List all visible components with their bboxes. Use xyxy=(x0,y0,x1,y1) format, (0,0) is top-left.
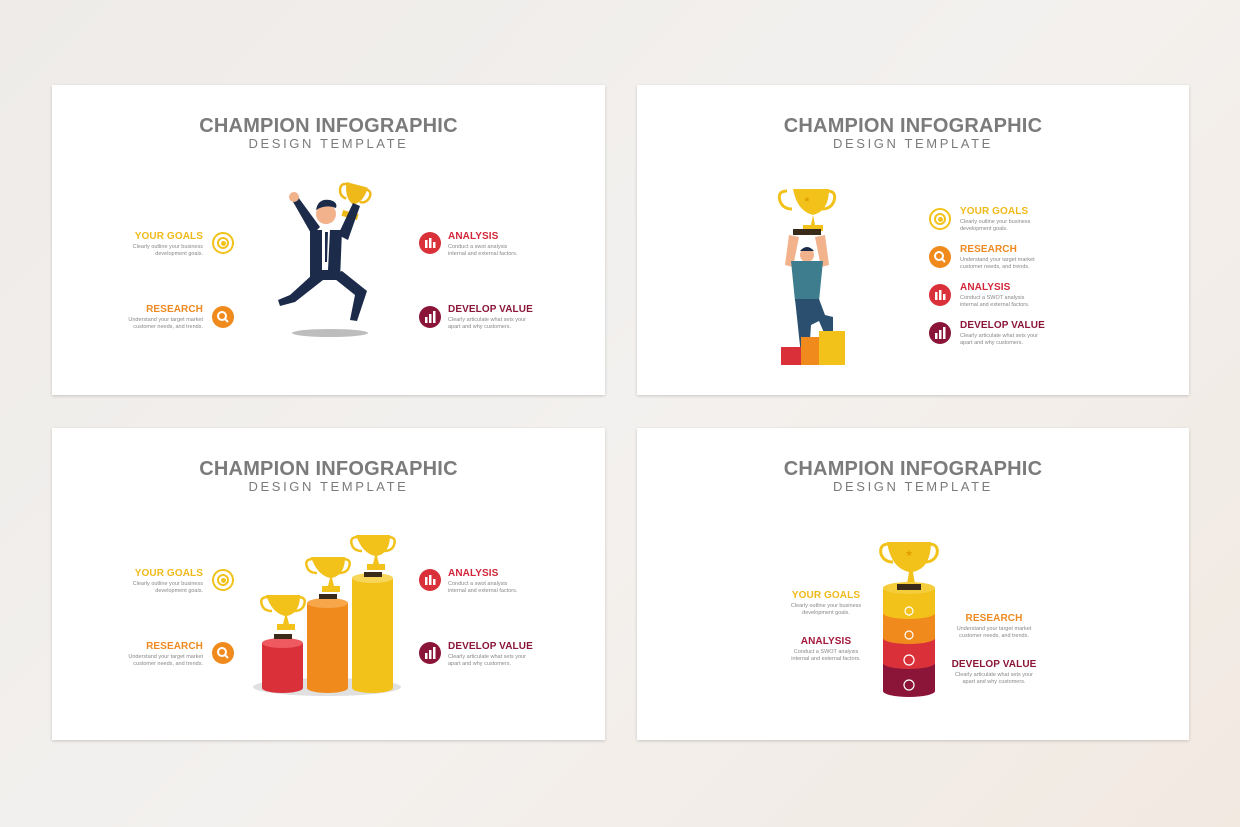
item: your goals: YOUR GOALS xyxy=(135,231,203,242)
subtitle: DESIGN TEMPLATE xyxy=(249,479,408,494)
item: analysis xyxy=(448,231,517,257)
item: your goals: YOUR GOALS xyxy=(135,568,203,579)
text: your goals: Clearly outline your business xyxy=(960,219,1030,225)
item: develop value: apart and why customers. xyxy=(448,324,511,330)
icon: growth bars xyxy=(419,642,441,664)
text: your goals: Clearly outline your business xyxy=(791,603,861,609)
item: research xyxy=(128,304,203,330)
item: your goals: development goals. xyxy=(155,588,203,594)
item: your goals: Clearly outline your business xyxy=(133,581,203,587)
text: your goals: development goals. xyxy=(960,226,1008,232)
text: research: customer needs, and trends. xyxy=(960,264,1030,270)
item: analysis: Conduct a swot analysis xyxy=(448,581,507,587)
item: analysis: ANALYSIS xyxy=(448,568,498,579)
item: your goals: development goals. xyxy=(155,251,203,257)
panel: jumping man xyxy=(52,85,605,395)
text: develop value: DEVELOP VALUE xyxy=(960,320,1045,331)
text: develop value: apart and why customers. xyxy=(960,340,1023,346)
text: analysis: internal and external factors. xyxy=(960,302,1029,308)
title: CHAMPION INFOGRAPHIC xyxy=(784,458,1042,480)
text: research xyxy=(960,244,1035,270)
text: your goals xyxy=(960,206,1030,232)
icon: target xyxy=(929,208,951,230)
text: analysis xyxy=(960,282,1029,308)
illustration: jumping man with trophy xyxy=(278,182,372,337)
text: research: RESEARCH xyxy=(960,244,1017,255)
text: develop value: apart and why customers. xyxy=(962,679,1025,685)
text: your goals xyxy=(791,590,861,616)
illustration: man on steps xyxy=(778,189,845,365)
panel: trophy podiums xyxy=(52,428,605,740)
item: develop value: DEVELOP VALUE xyxy=(448,641,533,652)
icon: magnifier xyxy=(929,246,951,268)
panel: man lifting trophy xyxy=(637,85,1189,395)
icon: target xyxy=(212,569,234,591)
text: develop value xyxy=(960,320,1045,346)
text: analysis: Conduct a SWOT analysis xyxy=(794,649,858,655)
icon: magnifier xyxy=(212,306,234,328)
text: research: Understand your target market xyxy=(957,626,1031,632)
item: your goals xyxy=(132,231,203,257)
text: research: Understand your target market xyxy=(960,257,1035,263)
chart: stacked cylinder with trophy xyxy=(879,542,939,697)
item: research: customer needs, and trends. xyxy=(133,661,203,667)
item: analysis: internal and external factors. xyxy=(448,251,517,257)
text: analysis: ANALYSIS xyxy=(801,636,851,647)
item: research: Understand your target market xyxy=(128,654,203,660)
text: research: RESEARCH xyxy=(966,613,1022,624)
item: develop value: DEVELOP VALUE xyxy=(448,304,533,315)
subtitle: DESIGN TEMPLATE xyxy=(249,136,408,151)
item: analysis: Conduct a swot analysis xyxy=(448,244,507,250)
text: develop value: Clearly articulate what sets your xyxy=(955,672,1033,678)
item: research: RESEARCH xyxy=(146,304,203,315)
chart: stacked cylinder with trophy: ★ xyxy=(905,548,913,558)
item: analysis xyxy=(448,568,517,594)
title: CHAMPION INFOGRAPHIC xyxy=(199,458,458,480)
illustration: man on steps: ★ xyxy=(803,195,811,204)
icon: bars xyxy=(419,232,441,254)
text: analysis: ANALYSIS xyxy=(960,282,1010,293)
text: develop value: Clearly articulate what sets your xyxy=(960,333,1038,339)
item: develop value xyxy=(448,304,533,330)
item: research: RESEARCH xyxy=(146,641,203,652)
chart: cylinder podiums with trophies xyxy=(253,535,401,696)
icon: growth bars xyxy=(929,322,951,344)
icon: magnifier xyxy=(212,642,234,664)
subtitle: DESIGN TEMPLATE xyxy=(833,479,993,494)
item: your goals: Clearly outline your business xyxy=(133,244,203,250)
subtitle: DESIGN TEMPLATE xyxy=(833,136,993,151)
panel: stacked cylinder xyxy=(637,428,1189,740)
text: your goals: development goals. xyxy=(802,610,850,616)
text: your goals: YOUR GOALS xyxy=(960,206,1028,217)
icon: growth bars xyxy=(419,306,441,328)
item: research xyxy=(128,641,203,667)
item: research: customer needs, and trends. xyxy=(133,324,203,330)
text: develop value xyxy=(952,659,1036,685)
text: develop value: DEVELOP VALUE xyxy=(952,659,1036,670)
item: develop value: Clearly articulate what sets your xyxy=(448,654,526,660)
title: CHAMPION INFOGRAPHIC xyxy=(199,115,458,137)
icon: target xyxy=(212,232,234,254)
icon: bars xyxy=(929,284,951,306)
text: your goals: YOUR GOALS xyxy=(792,590,860,601)
item: develop value xyxy=(448,641,533,667)
icon: bars xyxy=(419,569,441,591)
text: research: customer needs, and trends. xyxy=(959,633,1029,639)
item: your goals xyxy=(132,568,203,594)
text: analysis: internal and external factors. xyxy=(791,656,861,662)
item: develop value: apart and why customers. xyxy=(448,661,511,667)
item: analysis: internal and external factors. xyxy=(448,588,517,594)
item: research: Understand your target market xyxy=(128,317,203,323)
title: CHAMPION INFOGRAPHIC xyxy=(784,115,1042,137)
text: analysis xyxy=(791,636,861,662)
item: develop value: Clearly articulate what sets your xyxy=(448,317,526,323)
text: analysis: Conduct a SWOT analysis xyxy=(960,295,1024,301)
text: research xyxy=(957,613,1032,639)
item: analysis: ANALYSIS xyxy=(448,231,498,242)
